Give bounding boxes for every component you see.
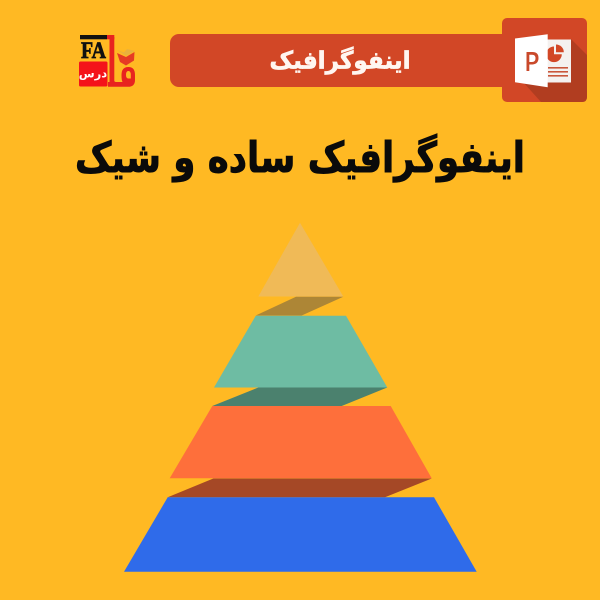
pyramid shadow 2 [212,388,387,406]
icon: PowerPoint [502,18,587,102]
banner label: اینفوگرافیک [270,46,410,74]
pyramid chart [124,223,477,572]
title: اینفوگرافیک ساده و شیک [75,133,525,183]
pyramid tier 4: blue [124,497,477,572]
logo book [117,49,135,66]
pyramid tier 2: teal [214,316,387,388]
pyramid tier 1: top triangle [258,223,343,296]
logo red box [79,62,108,86]
logo letter fa [108,37,135,87]
logo box text: درس [79,66,107,80]
logo: FA Dars [79,35,135,87]
pyramid shadow 3 [168,478,432,497]
pyramid tier 3: orange [170,406,432,478]
header banner [170,34,515,87]
pyramid shadow 1 [256,297,343,316]
logo FA letters: FA [81,38,107,64]
